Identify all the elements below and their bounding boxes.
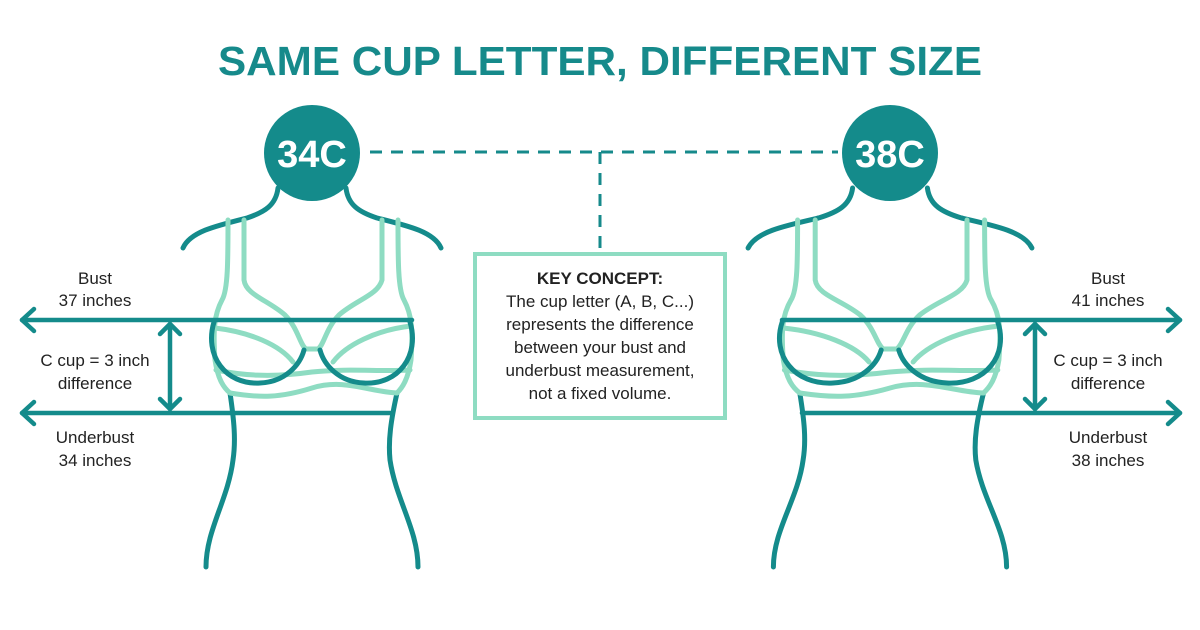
dashed connector (370, 152, 838, 250)
left labels: C cup = 3 inch (40, 351, 150, 370)
key concept box: underbust measurement, (506, 361, 694, 380)
arrows right (782, 309, 1180, 424)
left labels: 34 inches (59, 451, 131, 470)
left labels: 37 inches (59, 291, 131, 310)
left figure: 34C (22, 105, 441, 567)
right labels: C cup = 3 inch (1053, 351, 1163, 370)
right labels: Bust (1091, 269, 1125, 288)
left labels (40, 269, 150, 470)
right labels: 38 inches (1072, 451, 1144, 470)
left labels: Underbust (56, 428, 134, 447)
key concept box: not a fixed volume. (529, 384, 671, 403)
key concept box: KEY CONCEPT: (537, 269, 663, 288)
badge 38C: 38C (855, 134, 925, 176)
right labels: difference (1071, 374, 1145, 393)
bust arrow (22, 309, 412, 424)
right labels: 41 inches (1072, 291, 1144, 310)
badge 34C: 34C (277, 134, 347, 176)
left labels: Bust (78, 269, 112, 288)
right figure: 38C (748, 105, 1180, 567)
right labels (1053, 269, 1163, 470)
key concept box (475, 254, 725, 418)
badge 34C (264, 105, 360, 201)
left labels: difference (58, 374, 132, 393)
title: SAME CUP LETTER, DIFFERENT SIZE (218, 38, 982, 84)
key concept box: The cup letter (A, B, C...) (506, 292, 694, 311)
badge 38C (842, 105, 938, 201)
key concept box: between your bust and (514, 338, 686, 357)
key concept box: represents the difference (506, 315, 694, 334)
right labels: Underbust (1069, 428, 1147, 447)
